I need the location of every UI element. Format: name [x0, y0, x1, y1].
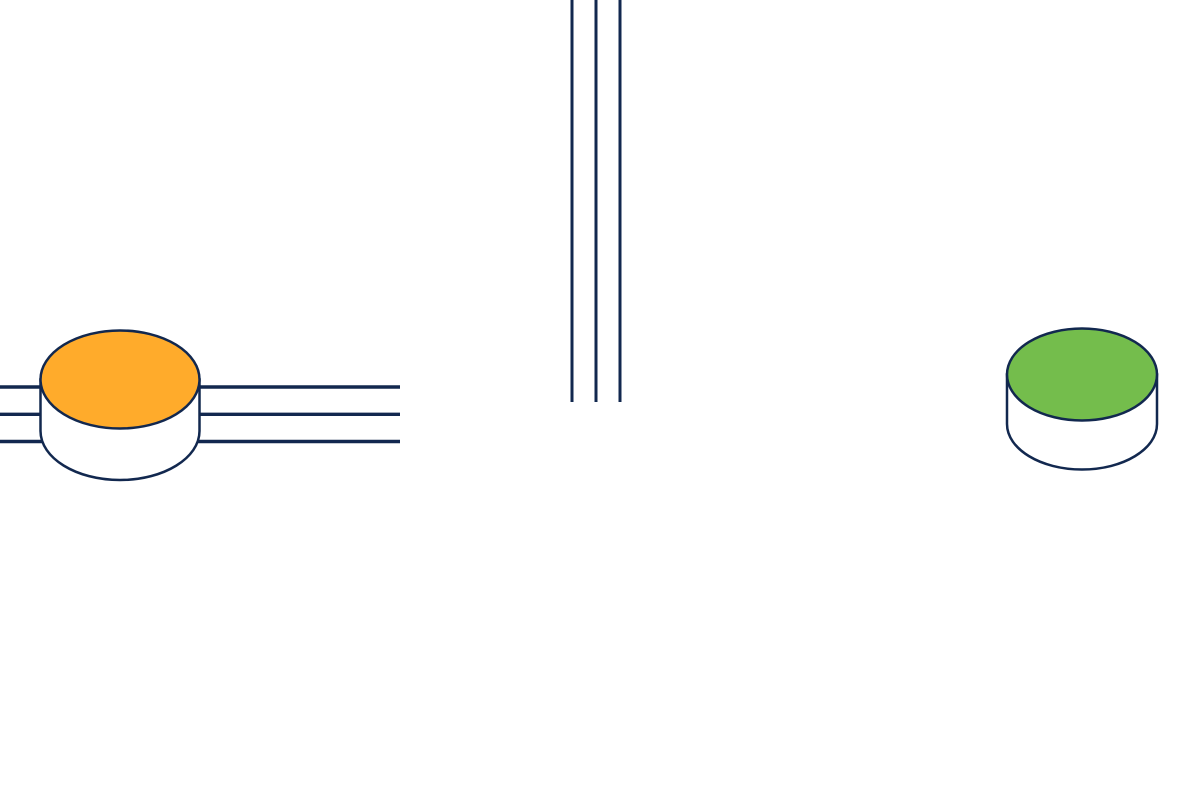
vertical triple lines [572, 0, 620, 402]
orange cylinder node [40, 330, 200, 480]
horizontal triple lines [0, 387, 400, 442]
green cylinder node [1007, 328, 1157, 470]
